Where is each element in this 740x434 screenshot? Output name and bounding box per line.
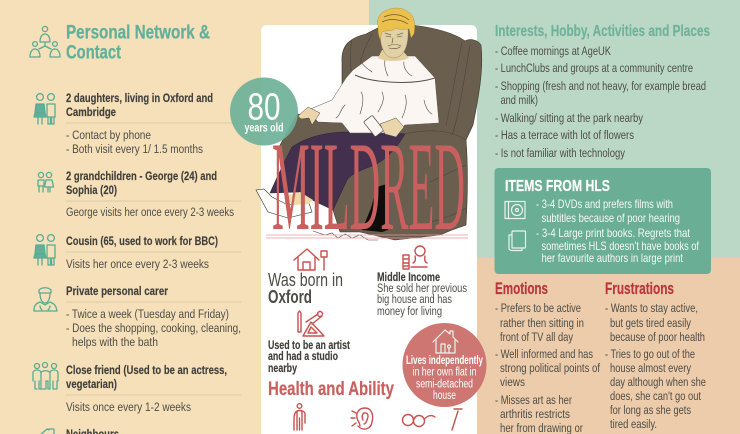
icon: books [509, 231, 526, 250]
list: interests: - Walking/ sitting at the park nearby [495, 111, 644, 125]
list: emotions: rather then sitting in [500, 316, 584, 330]
badge: lives independently: Lives independently [406, 355, 483, 367]
fact: middle income: money for living [377, 304, 442, 318]
icon: standing person [294, 404, 305, 430]
contact: cousin: Cousin (65, used to work for BBC) [66, 234, 218, 248]
heading: personal network and contact [66, 22, 210, 64]
heading: emotions: Emotions [495, 280, 548, 298]
list: frustrations: - Tries to go out of the [605, 347, 695, 361]
panel: items from HLS [494, 168, 711, 274]
icon: art tools [298, 311, 324, 336]
fact: used to be an artist: and had a studio [268, 349, 338, 363]
contact: daughters: Cambridge [66, 105, 116, 119]
contact: daughters: - Contact by phone [66, 128, 151, 142]
badge: lives independently: house [433, 390, 456, 402]
list: emotions [495, 301, 600, 434]
panel: interests [495, 23, 710, 160]
contact: grandchildren: George visits her once every 2-3 weeks [66, 205, 234, 219]
fact: middle income: big house and has [377, 292, 452, 306]
icon: personal network [30, 26, 60, 57]
badge: lives independently [402, 323, 486, 407]
black gap under chair [362, 184, 388, 232]
icon: house with person [433, 330, 458, 353]
hands and phone [298, 107, 320, 125]
list: emotions: - Prefers to be active [495, 301, 581, 315]
icon: glasses [402, 414, 435, 426]
icon: neighbours [39, 429, 54, 434]
heading: personal network and contact: Contact [66, 42, 122, 64]
contact: private personal carer: helps with the bath [72, 335, 158, 349]
contact: daughters [34, 91, 241, 156]
contact: cousin: Visits her once every 2-3 weeks [66, 257, 209, 271]
skirt [270, 132, 405, 210]
list: interests: and milk) [500, 93, 538, 107]
list: frustrations: but gets tired easily [610, 316, 692, 330]
contact: close friend: Visits once every 1-2 weeks [66, 400, 191, 414]
blouse [308, 56, 439, 133]
illustration: Mildred in armchair [256, 8, 482, 240]
list: interests: - Coffee mornings at AgeUK [495, 44, 612, 58]
list: emotions: front of TV all day [500, 330, 574, 344]
panel: items from HLS: her favourite authors in large print [542, 251, 684, 265]
contact: grandchildren: 2 grandchildren - George (24) and [66, 169, 217, 183]
neck and face [378, 50, 409, 61]
contact: close friend: Close friend (Used to be an actress, [66, 363, 227, 377]
scribble under chair [313, 231, 378, 240]
list: emotions: views [500, 375, 525, 389]
list: interests: - Has a terrace with lot of flowers [495, 128, 634, 142]
list: frustrations: house almost every [610, 361, 692, 375]
panel: items from HLS: - 3-4 DVDs and prefers films with [536, 197, 673, 211]
badge: lives independently: in her own flat in [412, 366, 476, 378]
list: emotions: strong political points of [500, 361, 600, 375]
icon: walking cane [452, 409, 462, 430]
fact: middle income [377, 246, 467, 318]
contact: private personal carer [34, 284, 241, 349]
list: frustrations: - Wants to stay active, [605, 301, 698, 315]
list: frustrations: day although when she [610, 375, 706, 389]
badge: age 80 [230, 78, 298, 146]
contact: close friend [33, 362, 241, 414]
heading: frustrations: Frustrations [605, 280, 674, 298]
fact: used to be an artist: Used to be an artist [268, 338, 350, 352]
list: frustrations: tired easily. [610, 417, 657, 431]
badge: age 80: 80 [248, 86, 280, 128]
shoes [256, 189, 312, 218]
heading: personal network and contact: Personal Network & [66, 22, 210, 44]
panel: items from HLS: subtitles because of poor hearing [542, 211, 680, 225]
fact: born in Oxford: Oxford [268, 287, 312, 307]
panel: emotions [495, 280, 600, 434]
contact: close friend: vegetarian) [66, 377, 117, 391]
list: interests: - Is not familiar with technology [495, 146, 626, 160]
icon: daughters [34, 94, 55, 124]
icon: ear [351, 408, 373, 429]
contact: private personal carer: - Does the shopping, cooking, cleaning, [66, 321, 241, 335]
heading: items from HLS: ITEMS FROM HLS [505, 178, 610, 195]
panel: profile card [261, 25, 477, 434]
armchair [279, 23, 482, 240]
fact: middle income: Middle Income [377, 270, 440, 284]
list: emotions: - Misses art as her [495, 393, 572, 407]
heading: health and ability: Health and Ability [268, 379, 394, 400]
icon: carer [34, 288, 57, 311]
contact: private personal carer: - Twice a week (Tuesday and Friday) [66, 307, 229, 321]
list: frustrations: because of poor health [610, 330, 705, 344]
icon: cousin [34, 235, 55, 265]
list: frustrations [605, 301, 706, 431]
panel: frustrations [605, 280, 706, 431]
icon: close friend [33, 362, 58, 389]
icon: coins and person [403, 246, 427, 269]
list: emotions: arthritis restricts [500, 407, 570, 421]
panel: personal network and contact [30, 22, 241, 434]
fact: used to be an artist: nearby [268, 361, 297, 375]
contact: neighbours [39, 427, 119, 434]
fact: used to be an artist [268, 311, 350, 375]
contact: private personal carer: Private personal carer [66, 284, 168, 298]
contact: grandchildren: Sophia (20) [66, 183, 117, 197]
icon: house and sign [294, 249, 327, 270]
icon: grandchildren [38, 172, 54, 192]
list: interests [495, 44, 706, 160]
badge: lives independently: semi-detached [416, 378, 473, 390]
list: frustrations: for long as she gets [610, 403, 691, 417]
hair [378, 8, 415, 39]
icon: DVD [505, 202, 525, 218]
fact: born in Oxford [268, 249, 343, 307]
fact: middle income: She sold her previous [377, 281, 467, 295]
contact: daughters: - Both visit every 1/ 1.5 months [66, 142, 203, 156]
contact: grandchildren [38, 169, 241, 219]
section: health and ability [268, 379, 462, 430]
contact: daughters: 2 daughters, living in Oxford and [66, 91, 213, 105]
list: emotions: - Well informed and has [495, 347, 593, 361]
contact: cousin [34, 234, 241, 271]
fact: born in Oxford: Was born in [268, 270, 343, 290]
badge: age 80: years old [244, 122, 284, 134]
list: frustrations: does, she can't go out [610, 389, 701, 403]
panel: items from HLS: - 3-4 Large print books. Regrets that [536, 226, 691, 240]
